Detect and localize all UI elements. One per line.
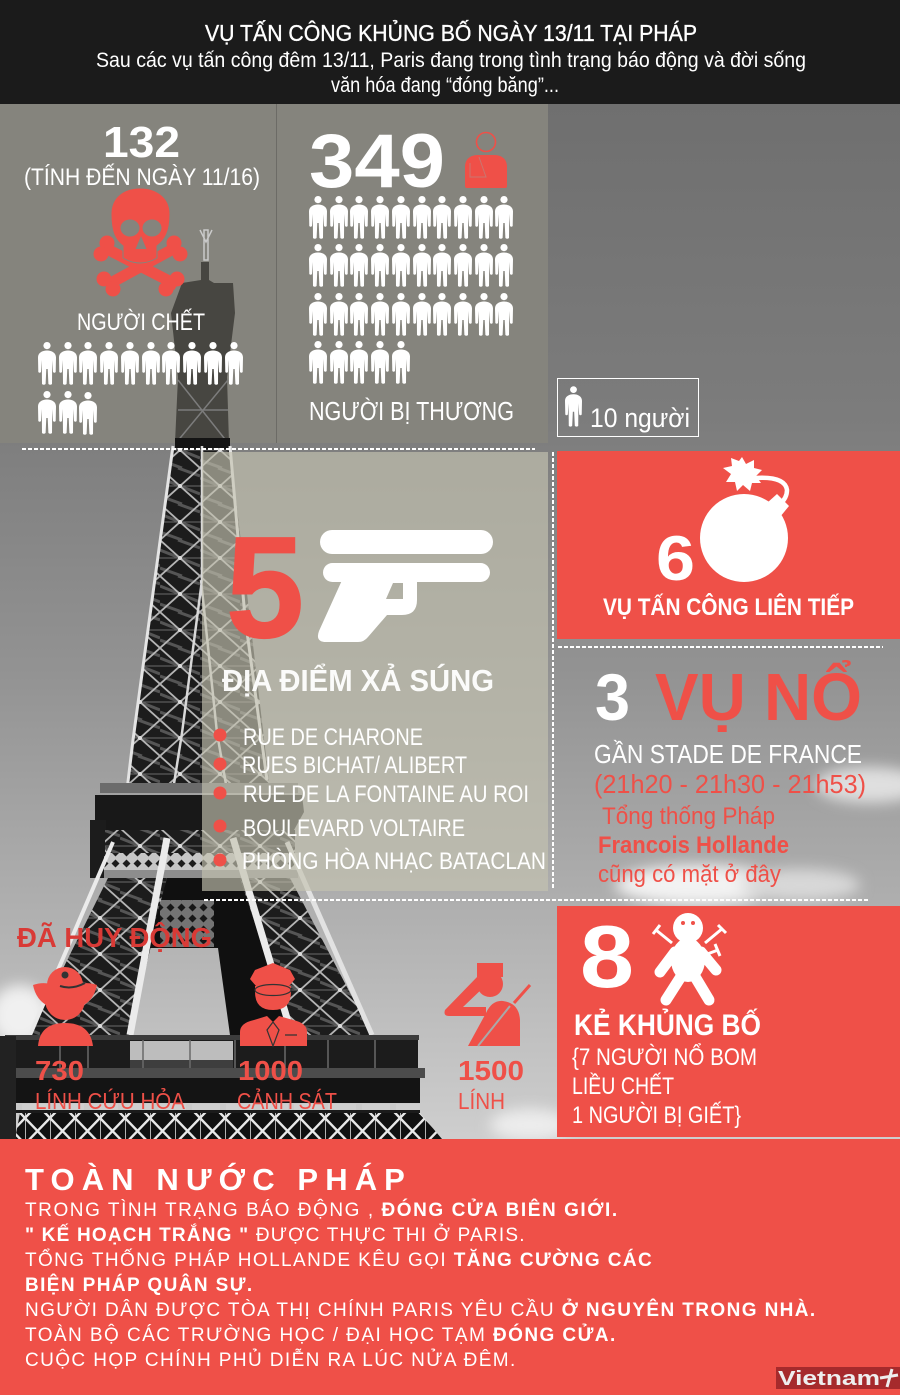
mobilised heading: ĐÃ HUY ĐỘNG xyxy=(17,921,212,953)
force counts and labels xyxy=(35,1055,524,1114)
icon: bomb xyxy=(700,457,789,582)
logo: Vietnam+ xyxy=(776,1367,900,1390)
icon: pistol xyxy=(318,530,493,642)
terrorists detail: {7 NGƯỜI NỔ BOM xyxy=(572,1043,757,1071)
list of shooting sites: RUE DE LA FONTAINE AU ROI xyxy=(243,781,529,808)
header band xyxy=(0,0,900,104)
France details: TỔNG THỐNG PHÁP HOLLANDE KÊU GỌI TĂNG CƯỜNG CÁC xyxy=(25,1249,653,1271)
panel: terrorists: 1 NGƯỜI BỊ GIẾT} xyxy=(572,1101,741,1129)
France details: TOÀN BỘ CÁC TRƯỜNG HỌC / ĐẠI HỌC TẠM ĐÓNG CỬA. xyxy=(25,1324,617,1346)
pictogram: deaths xyxy=(38,342,243,435)
force counts and labels: 1000 xyxy=(238,1055,303,1086)
lattice base xyxy=(15,1113,442,1139)
shooting sites number: 5 xyxy=(226,507,304,668)
France details: BIỆN PHÁP QUÂN SỰ. xyxy=(25,1274,254,1296)
header band: văn hóa đang “đóng băng”... xyxy=(331,74,559,97)
location: GẦN STADE DE FRANCE xyxy=(594,739,862,769)
France details: NGƯỜI DÂN ĐƯỢC TÒA THỊ CHÍNH PARIS YÊU CẦU Ở NGUYÊN TRONG NHÀ. xyxy=(25,1299,817,1321)
times: (21h20 - 21h30 - 21h53) xyxy=(594,769,866,799)
list of shooting sites: BOULEVARD VOLTAIRE xyxy=(243,815,465,842)
icon: injured person xyxy=(465,132,507,188)
lower legs xyxy=(30,878,167,1035)
icon: skull and crossbones xyxy=(94,188,188,296)
injured label: NGƯỜI BỊ THƯƠNG xyxy=(309,396,514,426)
pictogram: injured xyxy=(309,196,513,384)
injured number: 349 xyxy=(309,119,445,204)
second platform xyxy=(100,783,298,793)
legend: 1 icon = 10 people: 10 người xyxy=(590,403,690,433)
panel background: casualties xyxy=(0,104,548,443)
panel: shooting sites xyxy=(202,452,548,891)
panel: mobilised forces xyxy=(17,921,530,1114)
explosions number: 3 xyxy=(595,660,630,734)
legend: 1 icon = 10 people xyxy=(558,378,698,436)
deaths date note: (TÍNH ĐẾN NGÀY 11/16) xyxy=(24,163,260,191)
icon: firefighter xyxy=(33,967,97,1046)
explosions heading: VỤ NỔ xyxy=(655,660,862,735)
force counts and labels: CẢNH SÁT xyxy=(237,1086,337,1114)
panel: casualties xyxy=(24,118,514,435)
panel: terrorists xyxy=(557,906,900,1137)
president note: Tổng thống Pháp xyxy=(602,803,775,830)
force counts and labels: 1500 xyxy=(458,1055,524,1086)
panel: terrorists: LIỀU CHẾT xyxy=(572,1072,674,1100)
deaths number: 132 xyxy=(103,118,180,167)
list of shooting sites: RUE DE CHARONE xyxy=(243,724,423,751)
attacks number: 6 xyxy=(656,524,695,594)
attacks label: VỤ TẤN CÔNG LIÊN TIẾP xyxy=(603,593,854,621)
subtitle: Sau các vụ tấn công đêm 13/11, Paris đang trong tình trạng báo động và đời sống xyxy=(96,49,806,72)
shooting sites heading: ĐỊA ĐIỂM XẢ SÚNG xyxy=(222,662,494,698)
list of shooting sites: PHÒNG HÒA NHẠC BATACLAN xyxy=(242,848,546,875)
France details: " KẾ HOẠCH TRẮNG " ĐƯỢC THỰC THI Ở PARIS. xyxy=(25,1224,526,1246)
France details: TRONG TÌNH TRẠNG BÁO ĐỘNG , ĐÓNG CỬA BIÊN GIỚI. xyxy=(25,1199,619,1221)
terrorists number: 8 xyxy=(580,907,634,1006)
panel: explosions xyxy=(594,660,866,888)
list of shooting sites xyxy=(214,724,546,875)
title: VỤ TẤN CÔNG KHỦNG BỐ NGÀY 13/11 TẠI PHÁP xyxy=(205,18,697,46)
France details: CUỘC HỌP CHÍNH PHỦ DIỄN RA LÚC NỬA ĐÊM. xyxy=(25,1349,517,1371)
panel: all of France xyxy=(0,1139,900,1395)
force counts and labels: LÍNH CỨU HỎA xyxy=(35,1086,186,1114)
upper shaft xyxy=(127,448,270,790)
first platform xyxy=(5,1035,419,1040)
logo: Vietnam+: Vietnam xyxy=(778,1368,880,1390)
panel: explosions: cũng có mặt ở đây xyxy=(598,861,781,888)
icon: voodoo doll xyxy=(653,913,726,1000)
panel: attacks xyxy=(557,451,900,639)
Eiffel tower photo xyxy=(0,230,442,1139)
icon: police officer xyxy=(240,963,307,1046)
France heading: TOÀN NƯỚC PHÁP xyxy=(25,1161,412,1197)
icon: soldier xyxy=(444,963,530,1046)
deaths label: NGƯỜI CHẾT xyxy=(77,308,205,336)
tree xyxy=(0,1036,16,1139)
terrorists label: KẺ KHỦNG BỐ xyxy=(574,1008,761,1042)
France details xyxy=(25,1199,817,1371)
dashed separators xyxy=(22,449,883,900)
panel: explosions: Francois Hollande xyxy=(598,832,789,859)
photo background: sky xyxy=(0,104,900,1144)
list of shooting sites: RUES BICHAT/ ALIBERT xyxy=(242,752,467,779)
spire and top cabin xyxy=(171,262,235,443)
force counts and labels: 730 xyxy=(35,1055,84,1086)
clouds xyxy=(0,767,900,1141)
force counts and labels: LÍNH xyxy=(458,1088,505,1114)
